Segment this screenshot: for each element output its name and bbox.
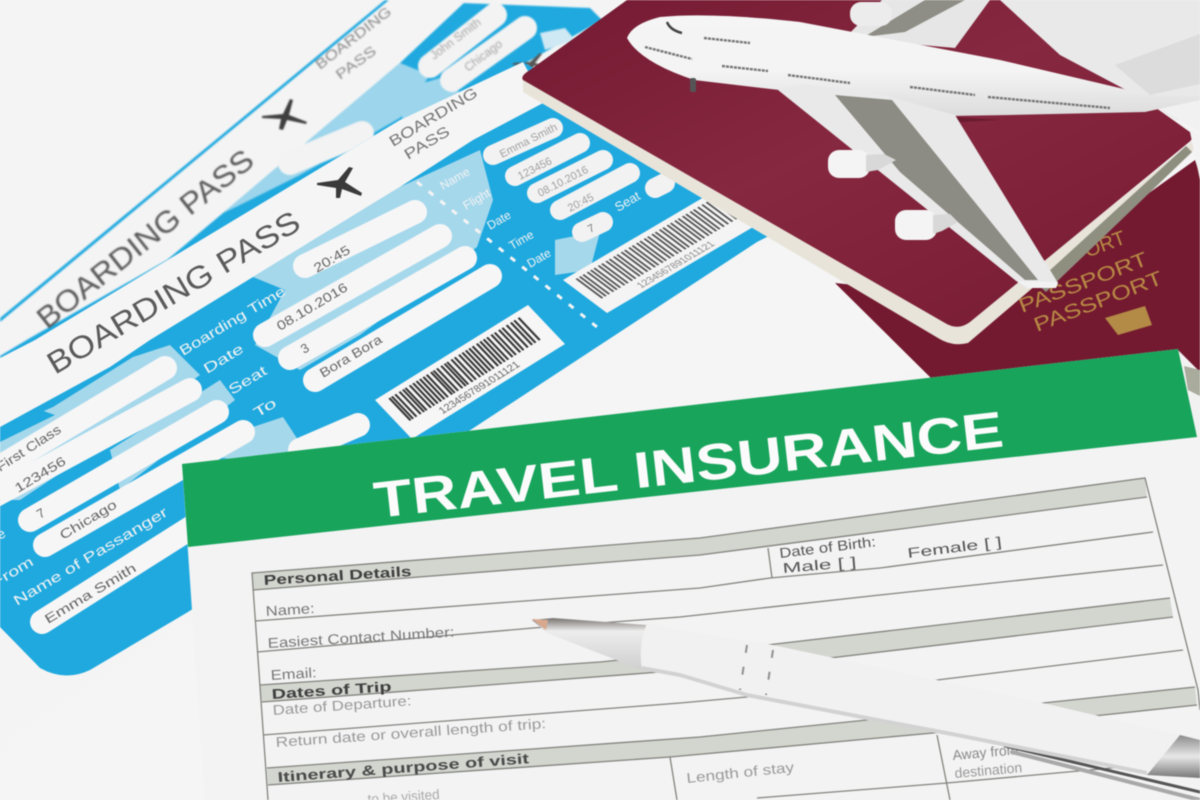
plane windows [645,38,1110,108]
text: ticket field labels: Flight [460,185,493,213]
form labels: Date of Departure: [272,692,412,718]
plane near wing [778,84,1058,288]
icon: silver pen [532,618,1200,800]
form labels: Female [ ] [906,534,1003,561]
pen rings [740,645,773,695]
form labels: Away from [952,741,1019,763]
text: front ticket side label [386,84,481,163]
form labels: Return date or overall length of trip: [275,715,547,750]
text: ticket field values [0,242,385,627]
form labels: Itinerary & purpose of visit [277,750,530,785]
form labels: Male [ ] [782,554,857,576]
pen tip [532,618,647,670]
text: ticket field values: Chicago [57,497,119,543]
title: TRAVEL INSURANCE [371,401,1006,529]
text: gold passport lines [1016,227,1166,337]
form labels: Date of Birth: [778,533,877,561]
form: travel insurance sheet [182,349,1200,800]
icon: partly hidden plane [513,53,545,71]
ticket: back boarding pass [0,0,602,362]
pen metal end [1147,735,1200,778]
text: ticket field values: 08.10.2016 [274,280,350,334]
plane tail [1115,34,1200,95]
text: ticket field labels: Name of Passanger [10,503,171,609]
form labels: Email: [270,664,317,683]
text: back ticket side label: PASS [332,42,379,82]
text: ticket field values: 123456 [12,453,68,496]
plane engines [828,150,870,178]
text: ticket field labels: Date [524,246,554,271]
passport top-right corner [1145,100,1200,180]
text: front ticket side label: BOARDING [386,84,481,150]
perforation line [417,182,597,327]
pen clip [1005,746,1200,800]
back ticket pale map [223,63,430,213]
text: ticket field values: Emma Smith [42,560,139,627]
form labels: Dates of Trip [271,678,392,702]
pen lower shading [642,666,1147,775]
text: ticket field labels: Time [506,227,536,253]
text: ticket field labels: Boarding Time [176,282,288,359]
passport pages [1184,366,1200,396]
text: back ticket side label: BOARDING [312,3,394,72]
text: ticket field values: 7 [34,505,48,522]
front ticket small field pills [493,128,665,232]
form labels: destination [954,759,1023,781]
text: ticket field values: Bora Bora [317,331,385,381]
text: ticket field labels: Name [438,164,473,193]
text: back ticket fields: John Smith [427,15,484,62]
ticket: front boarding pass: 123456 [516,155,554,183]
text: gold passport lines: PASSPORT [1016,248,1151,318]
text: small barcode number: 1234567891011121 [635,240,718,290]
passport: lower red passport [835,160,1200,396]
icon: plane front ticket [317,167,362,198]
form labels [263,533,1023,800]
barcode: large [375,305,565,439]
ticket: front boarding pass: 7 [586,222,597,236]
passport side pages [1036,146,1192,292]
text: back ticket fields [427,15,505,74]
form labels: Length of stay [686,759,795,786]
text: ticket field labels: Date [200,340,247,377]
text: back ticket fields: Chicago [461,37,505,74]
plane far engine [850,2,892,26]
ticket: front boarding pass: 08.10.2016 [536,164,590,200]
text: ticket field labels: Seat [612,188,643,215]
text: ticket field labels: Seat [225,362,270,398]
form green header [182,349,1197,547]
plane fuselage [627,15,1200,116]
plane shadow [710,76,1000,122]
form labels: Name: [265,600,315,619]
text: front ticket side label: PASS [401,123,453,163]
text: front ticket heading: BOARDING PASS [41,204,306,381]
text: back ticket heading: BOARDING PASS [31,143,260,335]
ticket: front boarding pass: Emma Smith [498,121,559,161]
back ticket white stub [0,0,467,356]
text: large barcode number: 1234567891011121 [437,360,523,416]
form section bars [252,478,1197,785]
text: ticket field values: 20:45 [311,242,353,276]
icon: white model airplane [627,0,1200,288]
ticket: front boarding pass: 20:45 [566,191,596,215]
form labels: Easiest Contact Number: [267,624,455,651]
form table lines [252,478,1200,800]
passport: upper red passport [522,0,1200,344]
front ticket left field pills [0,368,358,622]
text: ticket field labels: To [250,394,279,421]
form labels: Personal Details [263,563,412,588]
plane far wing [845,0,990,48]
plane landing gear [690,78,696,92]
text: ticket field labels: Date [484,208,514,233]
barcode: small [563,185,769,313]
text: gold passport lines: PORT [1069,227,1129,267]
text: ticket field values: 3 [298,340,312,357]
front ticket white stub [0,62,545,427]
icon: gold chip [1105,306,1152,335]
back ticket field pills [290,15,525,163]
text: back ticket side label [312,3,394,82]
ticket: front boarding pass [0,62,800,676]
icon: plane back ticket [262,99,307,130]
text: ticket field labels [0,164,643,609]
pen body [641,623,1180,775]
front ticket right field pills [265,212,490,380]
front ticket pale map [0,150,600,500]
text: gold passport lines: PASSPORT [1031,267,1166,337]
